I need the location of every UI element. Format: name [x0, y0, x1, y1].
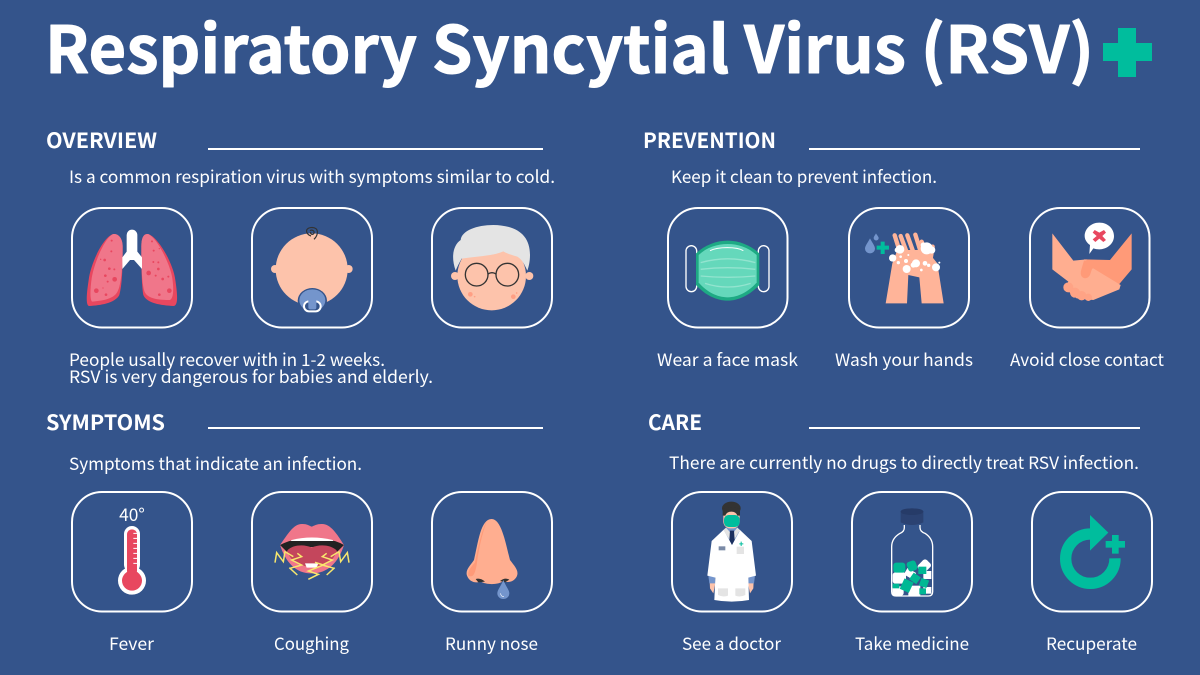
- text: overview note: RSV is very dangerous for babies and elderly.: [69, 363, 433, 388]
- icon card: lungs: [72, 208, 192, 328]
- text: overview note: People usally recover with in 1-2 weeks.: [69, 346, 385, 371]
- icon card: thermometer: [72, 492, 192, 612]
- panel: overview: [46, 125, 555, 388]
- labels: prevention: [657, 346, 1165, 371]
- icon card: washing hands: [849, 208, 969, 328]
- heading: prevention: PREVENTION: [643, 125, 776, 155]
- icon card: doctor: [672, 492, 792, 612]
- icon card: coughing mouth: [252, 492, 372, 612]
- heading: overview: OVERVIEW: [46, 125, 157, 155]
- panel: care: [648, 407, 1152, 655]
- panel: symptoms: [46, 407, 552, 655]
- text: care intro: There are currently no drugs to directly treat RSV infection.: [669, 449, 1139, 474]
- text: overview intro: Is a common respiration virus with symptoms similar to cold.: [69, 163, 555, 188]
- labels: symptoms: [109, 630, 538, 655]
- labels: symptoms: Runny nose: [445, 630, 538, 655]
- labels: symptoms: Coughing: [274, 630, 349, 655]
- icon card: baby: [252, 208, 372, 328]
- text: prevention intro: Keep it clean to prevent infection.: [671, 163, 937, 188]
- labels: care: Take medicine: [855, 630, 969, 655]
- text: overview note: [69, 346, 433, 388]
- heading: care: CARE: [648, 407, 702, 437]
- text: symptoms intro: Symptoms that indicate an infection.: [69, 450, 362, 475]
- labels: prevention: Wash your hands: [835, 346, 973, 371]
- icon card: medicine bottle: [852, 492, 972, 612]
- icon card: avoid close contact: [1030, 208, 1150, 328]
- title: Respiratory Syncytial Virus (RSV): [45, 0, 1094, 92]
- labels: symptoms: Fever: [109, 630, 154, 655]
- icon card: elderly person: [432, 208, 552, 328]
- icon card: runny nose: [432, 492, 552, 612]
- labels: prevention: Avoid close contact: [1010, 346, 1165, 371]
- icon card: recuperate arrow: [1032, 492, 1152, 612]
- panel: prevention: [643, 125, 1165, 371]
- icon card: face mask: [668, 208, 788, 328]
- icon: title plus: [1103, 28, 1152, 77]
- labels: care: See a doctor: [682, 630, 781, 655]
- heading: symptoms: SYMPTOMS: [46, 407, 165, 437]
- labels: care: Recuperate: [1046, 630, 1137, 655]
- labels: prevention: Wear a face mask: [657, 346, 799, 371]
- icon card: thermometer: 40°: [119, 501, 145, 526]
- labels: care: [682, 630, 1137, 655]
